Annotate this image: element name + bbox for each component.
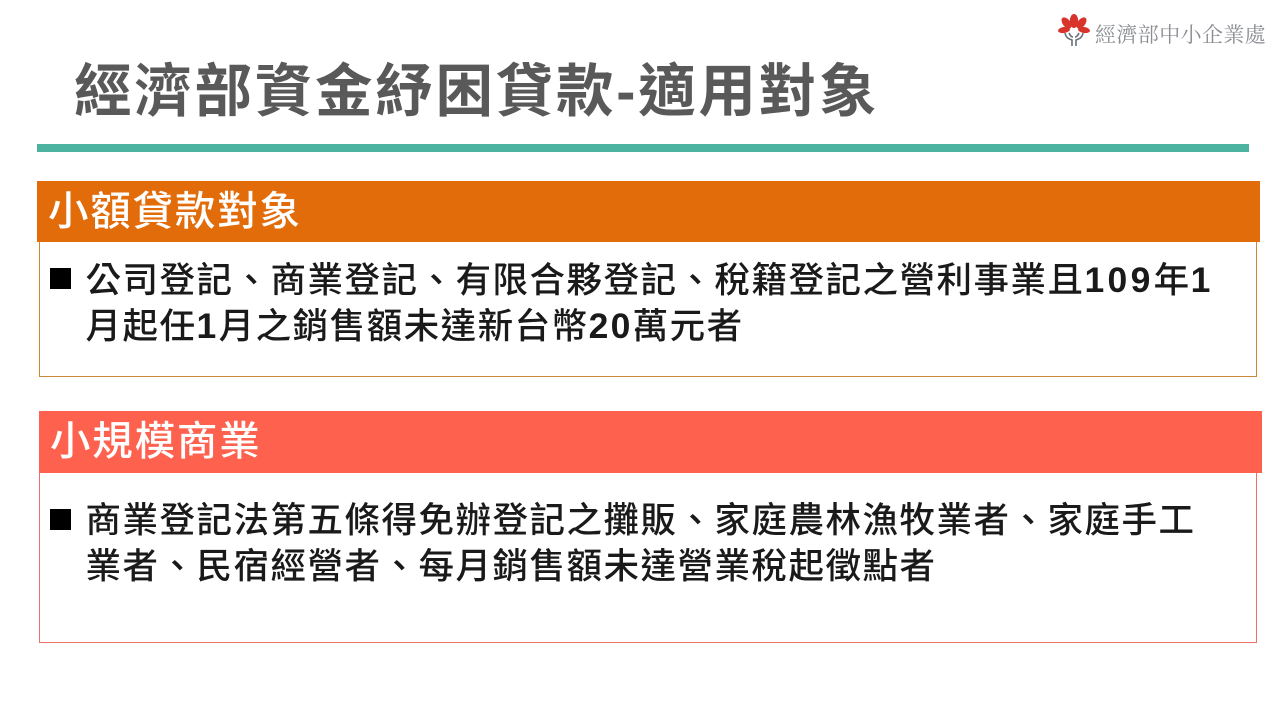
- bullet: [50, 509, 71, 530]
- panel body: [39, 241, 1257, 377]
- logo text: 經濟部中小企業處: [1095, 23, 1266, 47]
- panel: micro loan recipients: [37, 181, 1260, 377]
- body text line 1: 公司登記、商業登記、有限合夥登記、稅籍登記之營利事業且109年1: [86, 260, 1214, 300]
- title: 經濟部資金紓困貸款-適用對象: [74, 60, 879, 124]
- panel: small scale business: [39, 411, 1262, 643]
- panel body: [39, 472, 1257, 643]
- logo: ministry small business office: [1058, 14, 1266, 47]
- panel heading: 小規模商業: [50, 418, 262, 464]
- panel heading: [37, 181, 1260, 242]
- body text line 1: 商業登記法第五條得免辦登記之攤販、家庭農林漁牧業者、家庭手工: [86, 500, 1196, 540]
- title underline: [37, 144, 1249, 152]
- body text line 2: 月起任1月之銷售額未達新台幣20萬元者: [86, 306, 744, 346]
- icon: red flower with hands: [1058, 14, 1090, 46]
- body text line 2: 業者、民宿經營者、每月銷售額未達營業稅起徵點者: [86, 546, 937, 586]
- panel heading: 小額貸款對象: [48, 188, 302, 234]
- panel heading: [39, 411, 1262, 473]
- bullet: [50, 268, 71, 289]
